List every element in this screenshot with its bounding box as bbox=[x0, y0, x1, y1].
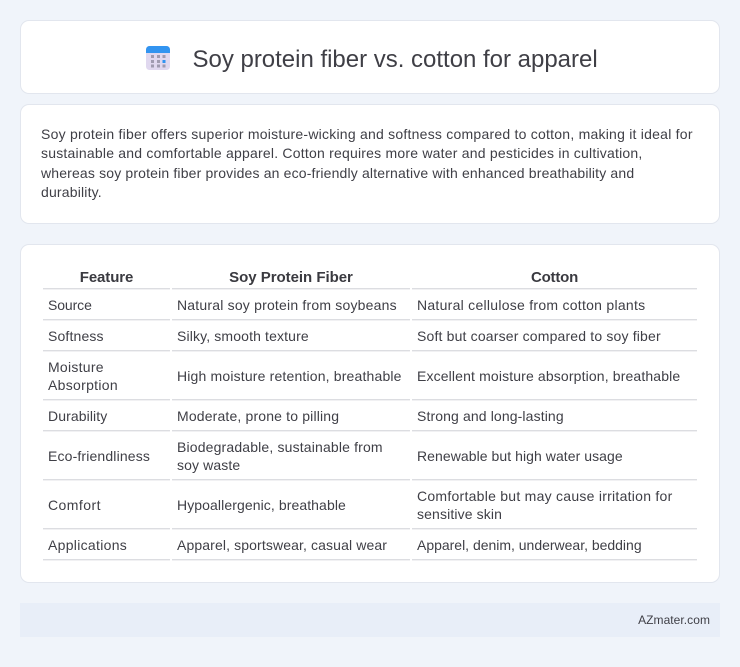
comparison table: Apparel, denim, underwear, bedding bbox=[417, 537, 642, 553]
comparison table: Soft but coarser compared to soy fiber bbox=[417, 328, 661, 344]
comparison table: Moderate, prone to pilling bbox=[177, 408, 339, 424]
comparison table: Comfort bbox=[48, 497, 101, 513]
footer text: AZmater.com bbox=[638, 613, 710, 627]
row: applications bbox=[48, 537, 642, 553]
comparison table: Apparel, sportswear, casual wear bbox=[177, 537, 387, 553]
title card bbox=[20, 20, 720, 94]
row: softness bbox=[48, 328, 661, 344]
comparison table: Biodegradable, sustainable from bbox=[177, 439, 383, 455]
comparison table: Durability bbox=[48, 408, 107, 424]
summary text: sustainable and comfortable apparel. Cotton requires more water and pesticides in cultivation, bbox=[41, 145, 643, 161]
comparison table: Soy Protein Fiber bbox=[229, 269, 353, 286]
footer bbox=[20, 603, 720, 637]
summary text: durability. bbox=[41, 184, 102, 200]
summary text: Soy protein fiber offers superior moisture-wicking and softness compared to cotton, making it ideal for bbox=[41, 126, 693, 142]
summary text bbox=[41, 126, 693, 200]
comparison table: Hypoallergenic, breathable bbox=[177, 497, 346, 513]
comparison table: Silky, smooth texture bbox=[177, 328, 309, 344]
comparison table: Comfortable but may cause irritation for bbox=[417, 488, 673, 504]
comparison table: Eco-friendliness bbox=[48, 448, 150, 464]
table header bbox=[80, 269, 578, 286]
comparison table: Source bbox=[48, 297, 92, 313]
icon: calendar bbox=[146, 46, 170, 70]
row: durability bbox=[48, 408, 564, 424]
title: Soy protein fiber vs. cotton for apparel bbox=[192, 46, 598, 73]
comparison table: Moisture bbox=[48, 359, 104, 375]
comparison table: Strong and long-lasting bbox=[417, 408, 564, 424]
table card bbox=[20, 244, 720, 583]
row: eco-friendliness bbox=[48, 439, 623, 473]
row: moisture absorption bbox=[48, 359, 680, 393]
comparison table: Excellent moisture absorption, breathable bbox=[417, 368, 680, 384]
comparison table: Applications bbox=[48, 537, 127, 553]
comparison table: High moisture retention, breathable bbox=[177, 368, 402, 384]
comparison table: Natural soy protein from soybeans bbox=[177, 297, 397, 313]
comparison table: Softness bbox=[48, 328, 104, 344]
comparison table: Absorption bbox=[48, 377, 118, 393]
comparison table: sensitive skin bbox=[417, 506, 502, 522]
summary card bbox=[20, 104, 720, 224]
comparison table: Feature bbox=[80, 269, 133, 286]
comparison table: Natural cellulose from cotton plants bbox=[417, 297, 645, 313]
comparison table: Renewable but high water usage bbox=[417, 448, 623, 464]
comparison table: Cotton bbox=[531, 269, 578, 286]
summary text: whereas soy protein fiber provides an eco-friendly alternative with enhanced breathability and bbox=[41, 165, 634, 181]
comparison table: soy waste bbox=[177, 457, 240, 473]
row: comfort bbox=[48, 488, 673, 522]
row: source bbox=[48, 297, 645, 313]
